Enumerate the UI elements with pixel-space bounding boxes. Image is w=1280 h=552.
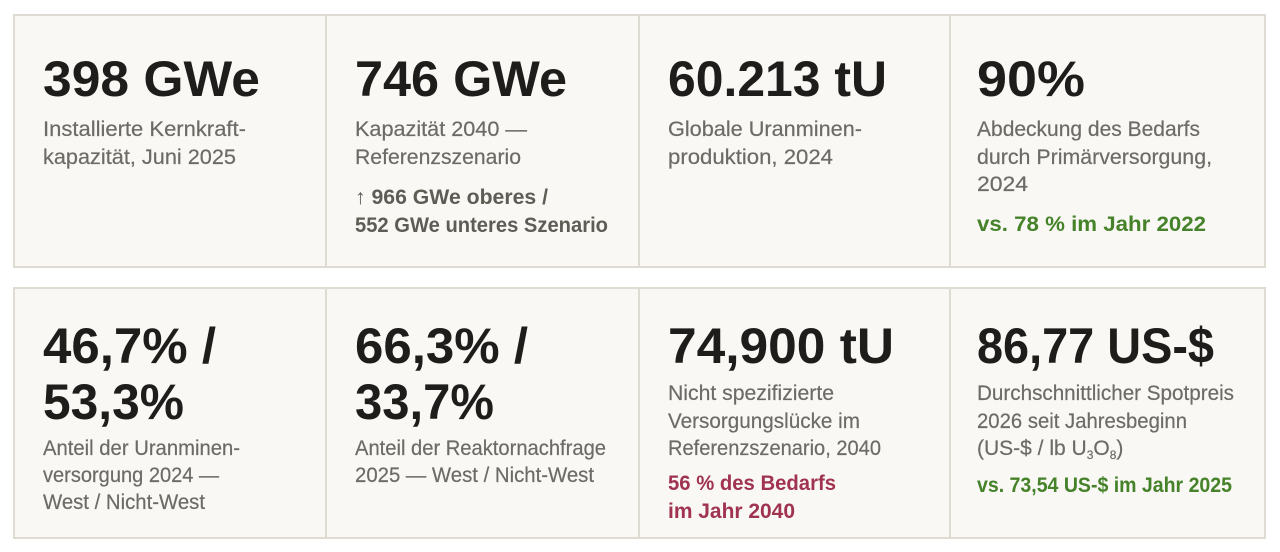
value: 86,77 US-$: 86,77 US-$ — [977, 318, 1214, 374]
panel: installed capacity — [14, 15, 326, 267]
description: produktion, 2024 — [668, 146, 833, 169]
description: kapazität, Juni 2025 — [43, 146, 236, 169]
description: Referenzszenario — [355, 146, 521, 169]
value: 46,7% / 53,3%: 46,7% / — [43, 318, 216, 374]
description: 2024 — [977, 173, 1028, 196]
description: Versorgungslücke im — [668, 410, 860, 433]
description: Anteil der Reaktornachfrage — [355, 437, 606, 460]
value: 66,3% / 33,7%: 33,7% — [355, 374, 494, 430]
description: West / Nicht-West — [43, 491, 205, 514]
value: 66,3% / 33,7% — [355, 318, 528, 430]
description: Abdeckung des Bedarfs — [977, 118, 1200, 141]
description — [977, 382, 1234, 462]
value: 66,3% / 33,7%: 66,3% / — [355, 318, 528, 374]
scenario range note: ↑ 966 GWe oberes / — [355, 186, 548, 209]
panel: uranium mine production — [639, 15, 950, 267]
panel: mine supply share — [14, 288, 326, 538]
description — [977, 118, 1212, 196]
description: Kapazität 2040 — — [355, 118, 527, 141]
demand share note: im Jahr 2040 — [668, 500, 795, 523]
scenario range note — [355, 186, 608, 237]
description: (US-$ / lb U — [977, 437, 1087, 460]
description: Nicht spezifizierte — [668, 382, 834, 405]
value: 398 GWe: 398 GWe — [43, 51, 260, 107]
description — [355, 118, 527, 169]
description: durch Primärversorgung, — [977, 146, 1212, 169]
panel: reactor demand share — [326, 288, 639, 538]
description — [668, 382, 881, 460]
description: O — [1093, 437, 1110, 460]
comparison note: vs. 73,54 US-$ im Jahr 2025 — [977, 474, 1232, 497]
description: Durchschnittlicher Spotpreis — [977, 382, 1234, 405]
description: 3 — [1087, 448, 1094, 462]
description: Installierte Kernkraft- — [43, 118, 246, 141]
value: 90%: 90% — [977, 51, 1085, 107]
value: 46,7% / 53,3% — [43, 318, 216, 430]
value: 74,900 tU: 74,900 tU — [668, 318, 894, 374]
panel: capacity 2040 — [326, 15, 639, 267]
scenario range note: 552 GWe unteres Szenario — [355, 214, 608, 237]
value: 60.213 tU: 60.213 tU — [668, 51, 887, 107]
description — [43, 118, 246, 169]
description: 2026 seit Jahresbeginn — [977, 410, 1187, 433]
value: 746 GWe: 746 GWe — [355, 51, 567, 107]
panel: primary supply coverage — [950, 15, 1265, 267]
comparison note: vs. 78 % im Jahr 2022 — [977, 213, 1206, 236]
description — [355, 437, 606, 487]
description — [668, 118, 862, 169]
description: versorgung 2024 — — [43, 464, 219, 487]
description: Anteil der Uranminen- — [43, 437, 240, 460]
description: Globale Uranminen- — [668, 118, 862, 141]
demand share note — [668, 472, 836, 523]
value: 46,7% / 53,3%: 53,3% — [43, 374, 184, 430]
description: 2025 — West / Nicht-West — [355, 464, 594, 487]
description — [43, 437, 240, 514]
demand share note: 56 % des Bedarfs — [668, 472, 836, 495]
description: ) — [1116, 437, 1123, 460]
panel: supply gap — [639, 288, 950, 538]
description: Referenzszenario, 2040 — [668, 437, 881, 460]
description: 8 — [1110, 448, 1117, 462]
panel: spot price — [950, 288, 1265, 538]
